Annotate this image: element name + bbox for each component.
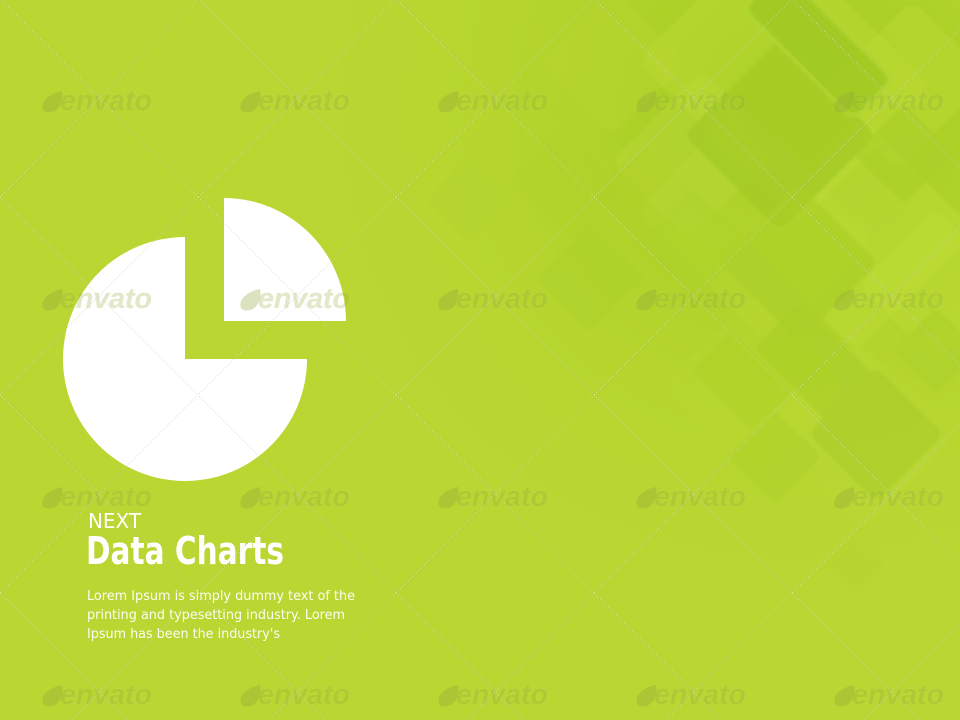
label: NEXT: NEXT: [88, 509, 142, 533]
watermarks: envato: [654, 481, 746, 513]
body text: Ipsum has been the industry's: [87, 627, 280, 642]
watermarks: envato: [258, 283, 350, 315]
body text: printing and typesetting industry. Lorem: [87, 608, 345, 623]
watermarks: envato: [456, 481, 548, 513]
watermarks: envato: [60, 85, 152, 117]
watermarks: envato: [852, 679, 944, 711]
watermarks: envato: [852, 85, 944, 117]
body text: [87, 589, 355, 642]
watermarks: envato: [456, 679, 548, 711]
watermarks: envato: [60, 283, 152, 315]
watermarks: envato: [258, 85, 350, 117]
watermarks: envato: [852, 481, 944, 513]
heading: Data Charts: Data Charts: [86, 529, 284, 573]
watermarks: envato: [258, 679, 350, 711]
watermarks: envato: [852, 283, 944, 315]
watermarks: envato: [654, 85, 746, 117]
detached pie slice: [224, 198, 346, 321]
watermarks: envato: [258, 481, 350, 513]
body text: Lorem Ipsum is simply dummy text of the: [87, 589, 355, 604]
watermarks: envato: [456, 85, 548, 117]
watermarks: envato: [654, 283, 746, 315]
main pie slice: [63, 237, 307, 481]
watermarks: envato: [60, 481, 152, 513]
watermarks: envato: [456, 283, 548, 315]
watermarks: envato: [654, 679, 746, 711]
watermarks: envato: [60, 679, 152, 711]
background diamonds: [428, 0, 960, 593]
